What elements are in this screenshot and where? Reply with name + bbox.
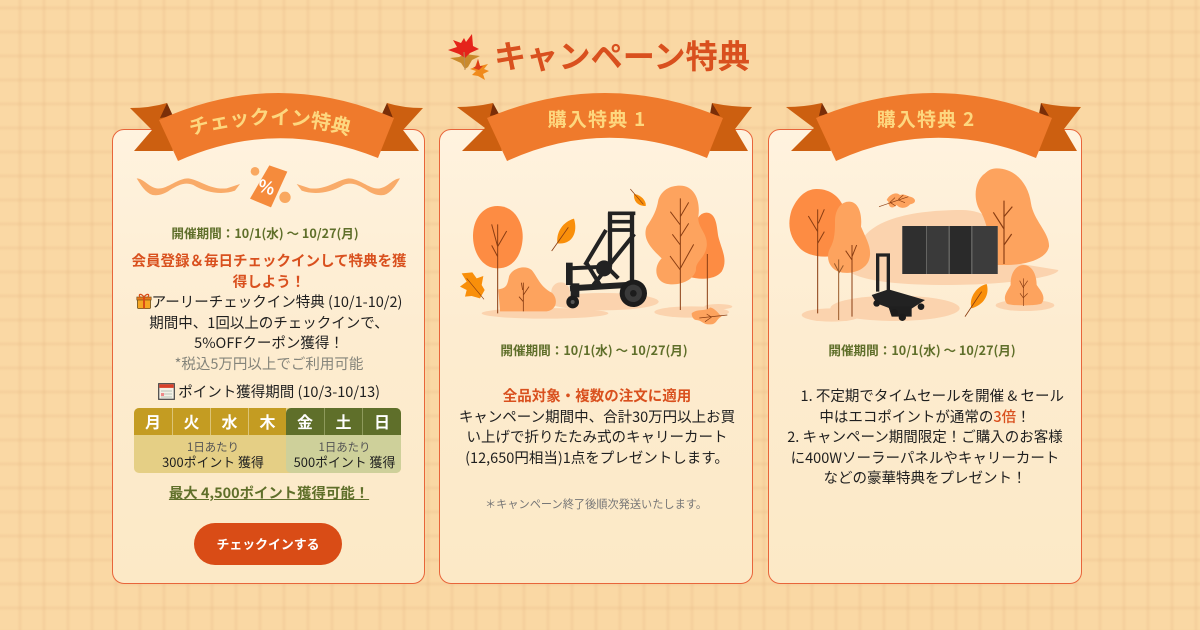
ribbon banner: purchase 2 (786, 93, 1081, 161)
weekday points (162, 439, 264, 470)
decoration: ribbons and coupon phone: % (255, 172, 278, 200)
points table: 水 (221, 409, 238, 433)
event period: 開催期間：10/1(水) 〜 10/27(月) (828, 340, 1016, 359)
offer list (787, 385, 1064, 488)
panel: purchase bonus 2 (768, 129, 1082, 584)
event period: 開催期間：10/1(水) 〜 10/27(月) (171, 223, 359, 242)
points table: 土 (335, 409, 352, 433)
headline: 会員登録＆毎日チェックインして特典を獲 (131, 250, 407, 271)
ribbon banner: check-in (130, 93, 423, 161)
early check-in text: *税込5万円以上でご利用可能 (175, 352, 363, 374)
early check-in text: アーリーチェックイン特典 (10/1-10/2) (152, 291, 402, 312)
offer list: 中はエコポイントが通常の3倍！ (819, 406, 1031, 426)
illustration: autumn trees and carry cart (460, 186, 732, 324)
offer text (459, 385, 735, 468)
points table: 火 (183, 409, 200, 433)
decoration: ribbons and coupon phone (136, 165, 400, 208)
headline (131, 250, 407, 292)
points table: 月 (145, 409, 161, 433)
points table: 日 (374, 409, 390, 433)
weekend points (294, 439, 395, 470)
maximum points: 最大 4,500ポイント獲得可能！ (169, 482, 369, 503)
offer list: などの豪華特典をプレゼント！ (824, 467, 1026, 488)
early check-in text: 期間中、1回以上のチェックインで、 (149, 312, 389, 332)
title: キャンペーン特典 (494, 32, 750, 78)
icon: calendar (158, 383, 175, 400)
points table: 木 (259, 409, 276, 433)
illustration: autumn trees, solar panel and trolley (789, 168, 1058, 322)
event period: 開催期間：10/1(水) 〜 10/27(月) (500, 340, 688, 359)
panel: check-in bonus (112, 129, 425, 584)
ribbon banner: purchase 1 (457, 93, 752, 161)
panel: purchase bonus 1 (439, 129, 753, 584)
weekend points: 500ポイント 獲得 (294, 452, 395, 470)
offer text: (12,650円相当)1点をプレゼントします。 (465, 446, 729, 468)
offer text: い上げで折りたたみ式のキャリーカート (466, 426, 728, 447)
early check-in text: 5%OFFクーポン獲得！ (194, 332, 344, 353)
button: check in: チェックインする (216, 534, 320, 553)
offer list: 1. 不定期でタイムセールを開催 & セール (801, 385, 1064, 406)
point period: ポイント獲得期間 (10/3-10/13) (178, 381, 380, 402)
icon: gift (136, 294, 152, 309)
ribbon banner: purchase 1: 購入特典 1 (548, 105, 646, 132)
points table (134, 408, 401, 473)
button: check in (194, 523, 342, 565)
offer list: に400Wソーラーパネルやキャリーカート (791, 446, 1059, 468)
ribbon banner: check-in: チェックイン特典 (190, 108, 350, 136)
ribbon banner: purchase 2: 購入特典 2 (877, 105, 975, 132)
offer list: 2. キャンペーン期間限定！ご購入のお客様 (787, 426, 1063, 447)
points table: 金 (297, 409, 313, 433)
offer text: キャンペーン期間中、合計30万円以上お買 (459, 406, 735, 426)
title icon: maple leaves (448, 34, 489, 80)
weekday points: 300ポイント 獲得 (162, 452, 264, 470)
offer text: 全品対象・複数の注文に適用 (503, 385, 691, 406)
shipping note: ＊キャンペーン終了後順次発送いたします。 (485, 496, 707, 512)
weekday points: 1日あたり (187, 439, 239, 455)
early check-in text (136, 291, 402, 374)
weekend points: 1日あたり (319, 439, 370, 455)
headline: 得しよう！ (233, 270, 305, 292)
